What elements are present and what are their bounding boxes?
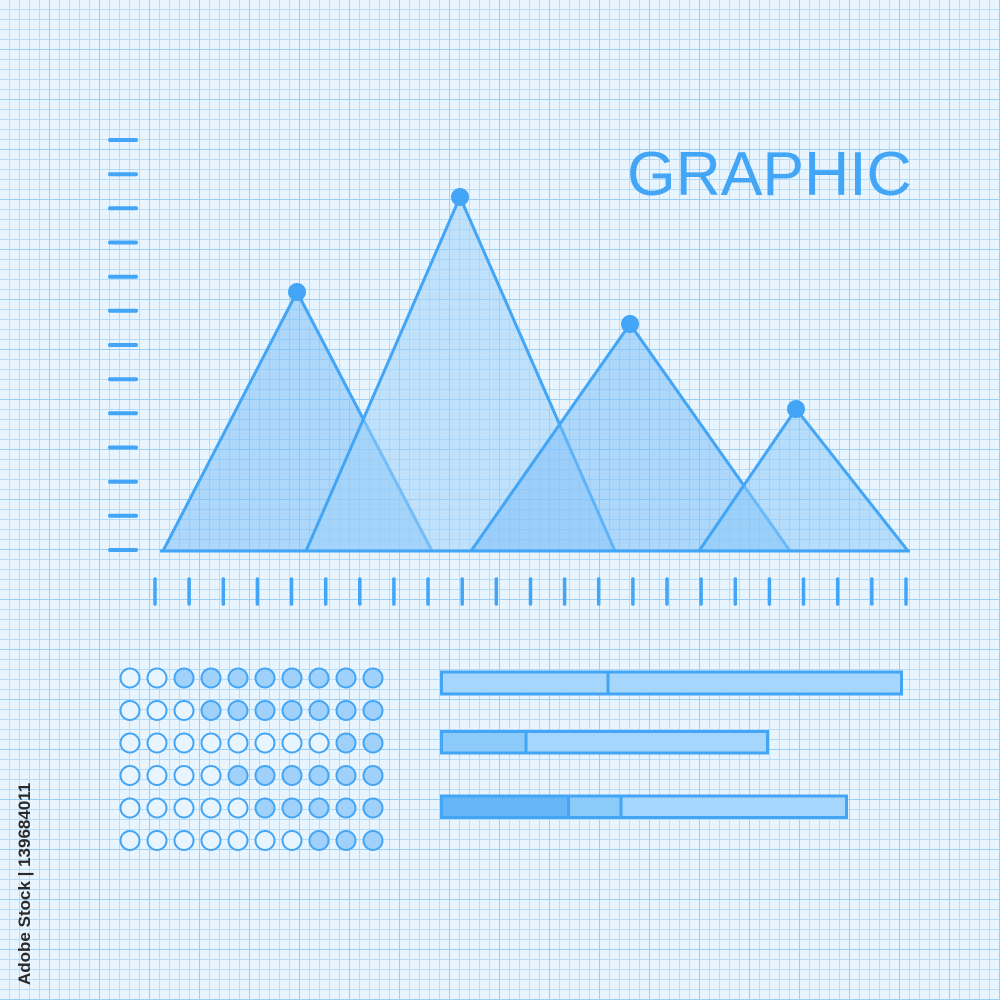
triangle 1 bbox=[163, 292, 432, 551]
triangle 3 bbox=[471, 324, 790, 551]
stock id text: Adobe Stock | 139684011 bbox=[15, 783, 34, 985]
peak dots bbox=[288, 188, 805, 418]
x axis ticks bbox=[155, 579, 906, 604]
dot matrix bbox=[120, 668, 382, 850]
y axis ticks bbox=[110, 140, 136, 550]
bar 2 bbox=[442, 732, 768, 753]
bar 1 bbox=[442, 672, 902, 694]
triangle 4 bbox=[699, 409, 908, 551]
title: GRAPHIC bbox=[627, 139, 912, 209]
bar 3 bbox=[442, 796, 846, 818]
triangle chart bbox=[160, 188, 910, 551]
triangle 2 bbox=[306, 197, 615, 551]
